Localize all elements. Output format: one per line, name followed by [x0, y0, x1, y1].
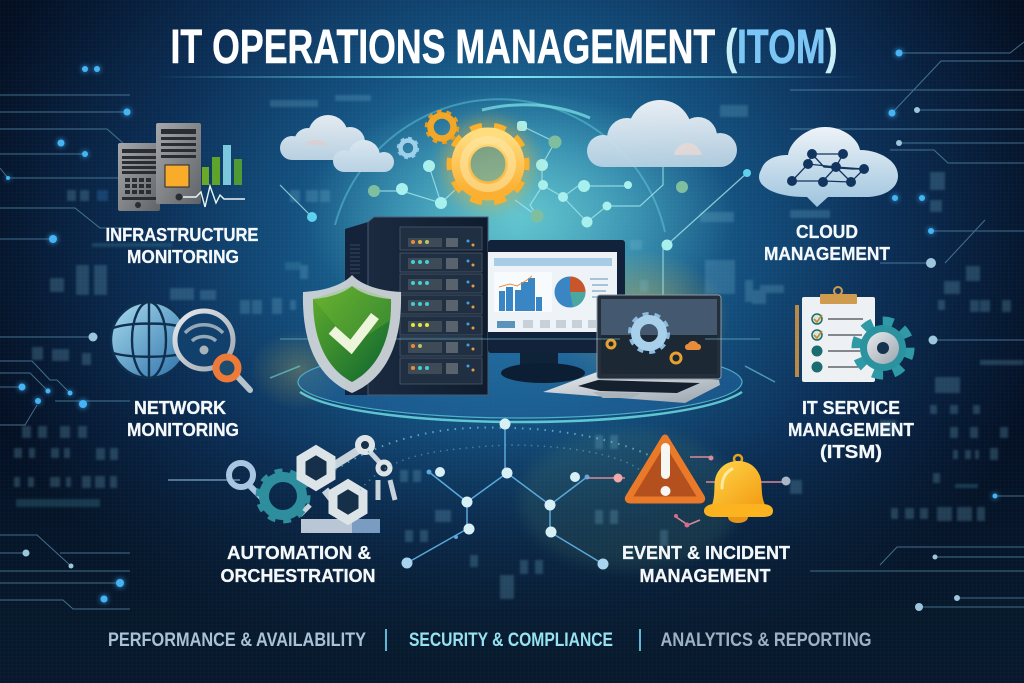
- checklist: [812, 314, 863, 372]
- infrastructure label: MONITORING: [127, 246, 239, 267]
- cloud management icon: [759, 127, 898, 207]
- laptop: [543, 295, 721, 403]
- blue glowing nodes: [6, 50, 998, 602]
- left clouds: [280, 115, 394, 172]
- ITSM label: (ITSM): [820, 441, 882, 462]
- automation label: ORCHESTRATION: [220, 565, 376, 586]
- rack unit 5: [400, 316, 482, 335]
- right cloud: [587, 100, 737, 167]
- large gear: [442, 118, 534, 210]
- bar chart: [494, 272, 552, 312]
- bell: [734, 455, 742, 463]
- robot gear: [259, 472, 307, 520]
- network icon: [111, 302, 250, 390]
- pale nodes: [22, 107, 960, 611]
- shield with check: [303, 275, 401, 393]
- rack unit 3: [400, 274, 482, 293]
- rack unit 4: [400, 295, 482, 314]
- alert icons: [587, 438, 790, 528]
- bottom bar: ANALYTICS & REPORTING: [660, 630, 872, 651]
- central network and arc: [280, 99, 751, 296]
- bottom bar: SECURITY & COMPLIANCE: [409, 630, 613, 651]
- ITSM label: IT SERVICE: [802, 397, 900, 418]
- automation label: AUTOMATION &: [227, 542, 371, 563]
- rack unit 2: [400, 253, 482, 272]
- status bars: [202, 145, 242, 185]
- infrastructure icon: [118, 123, 245, 211]
- cloud management label: CLOUD: [796, 221, 858, 242]
- robot joints: [301, 438, 390, 520]
- rack unit 7: [400, 358, 482, 384]
- pie chart: [554, 276, 586, 308]
- cloud management label: MANAGEMENT: [764, 243, 891, 264]
- laptop small gear right: [671, 353, 681, 363]
- branching network tree: [335, 418, 665, 570]
- monitor with dashboard: [488, 240, 625, 383]
- ITSM label: MANAGEMENT: [788, 419, 915, 440]
- network label: MONITORING: [127, 419, 239, 440]
- bottom bar: [108, 629, 872, 651]
- small orange gear: [427, 112, 457, 142]
- screen crossing lines: [0, 338, 760, 340]
- teal gear: [856, 321, 910, 375]
- data blocks: [14, 95, 1024, 599]
- event label: MANAGEMENT: [640, 565, 771, 586]
- rack unit 6: [400, 337, 482, 356]
- event label: EVENT & INCIDENT: [622, 542, 791, 563]
- network label: NETWORK: [134, 397, 227, 418]
- title rule: [155, 76, 865, 78]
- platform rings: [270, 346, 775, 422]
- rack unit 1: [400, 227, 482, 250]
- bottom bar: PERFORMANCE & AVAILABILITY: [108, 630, 366, 651]
- title: IT OPERATIONS MANAGEMENT (ITOM): [170, 21, 838, 74]
- server rack: [345, 217, 488, 395]
- laptop gear: [631, 315, 667, 351]
- laptop small gear left: [607, 340, 615, 348]
- laptop cloud: [685, 341, 701, 350]
- infrastructure label: INFRASTRUCTURE: [106, 224, 258, 245]
- automation icon: [168, 438, 395, 533]
- warning triangle: [628, 438, 702, 500]
- small blue gear: [398, 138, 418, 158]
- ITSM icon: [795, 287, 910, 382]
